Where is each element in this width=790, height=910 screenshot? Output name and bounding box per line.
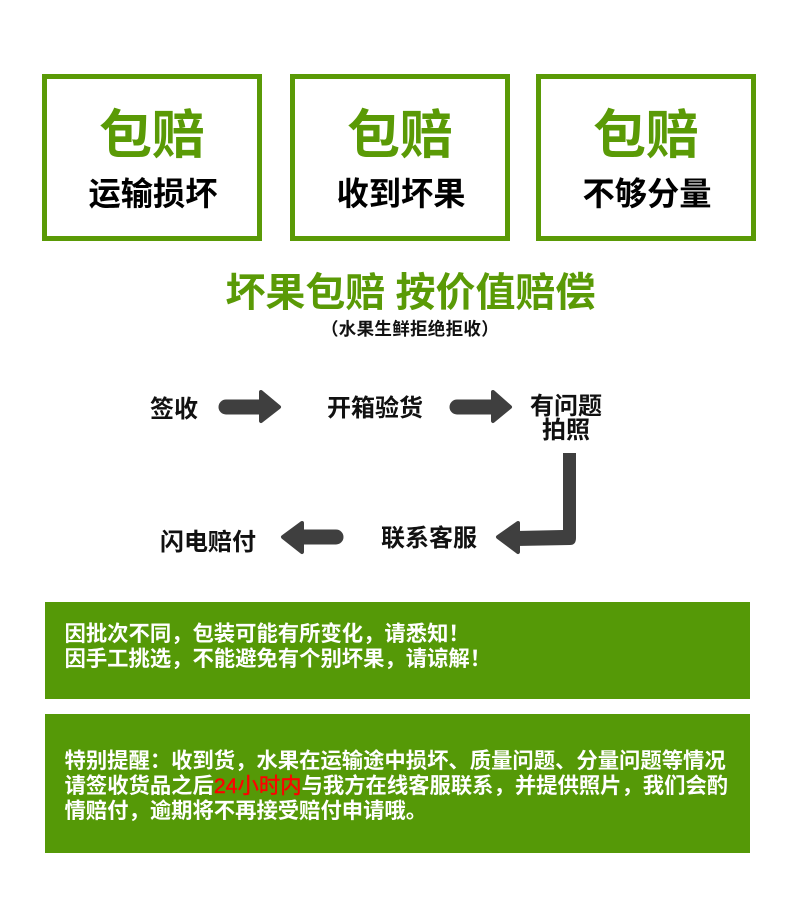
step: photograph the problem: 拍照	[542, 417, 590, 444]
heading: guarantee: 包赔	[347, 106, 453, 165]
step: contact customer service: 联系客服	[381, 525, 477, 552]
panel: short weight guarantee	[536, 74, 756, 241]
subtitle: （水果生鲜拒绝拒收）	[321, 319, 499, 339]
step: photograph the problem	[530, 393, 602, 444]
panel: packaging notice: 因手工挑选，不能避免有个别坏果，请谅解！	[64, 647, 491, 671]
step: sign for delivery: 签收	[150, 396, 198, 423]
step: fast compensation: 闪电赔付	[160, 529, 256, 556]
heading: guarantee: 包赔	[593, 106, 699, 165]
step: open and inspect: 开箱验货	[327, 395, 423, 422]
panel: packaging notice: 因批次不同，包装可能有所变化，请悉知！	[64, 622, 470, 646]
panel: received bad fruit guarantee	[290, 74, 510, 241]
panel: special reminder: 特别提醒：收到货，水果在运输途中损坏、质量问题、分量问题等情况	[64, 749, 726, 773]
label: received bad fruit: 收到坏果	[336, 176, 466, 212]
step: photograph the problem: 有问题	[530, 393, 602, 420]
panel: special reminder: 情赔付，逾期将不再接受赔付申请哦。	[64, 799, 427, 823]
label: transport damage: 运输损坏	[88, 176, 218, 212]
heading: guarantee: 包赔	[99, 106, 205, 165]
title: 坏果包赔 按价值赔偿	[225, 271, 596, 315]
panel: packaging notice	[45, 602, 750, 699]
panel: special reminder	[45, 714, 750, 853]
label: short weight: 不够分量	[582, 176, 712, 212]
panel: transport damage guarantee	[42, 74, 262, 241]
panel: special reminder: 请签收货品之后24小时内与我方在线客服联系，并提供照片，我们会酌	[64, 774, 728, 798]
